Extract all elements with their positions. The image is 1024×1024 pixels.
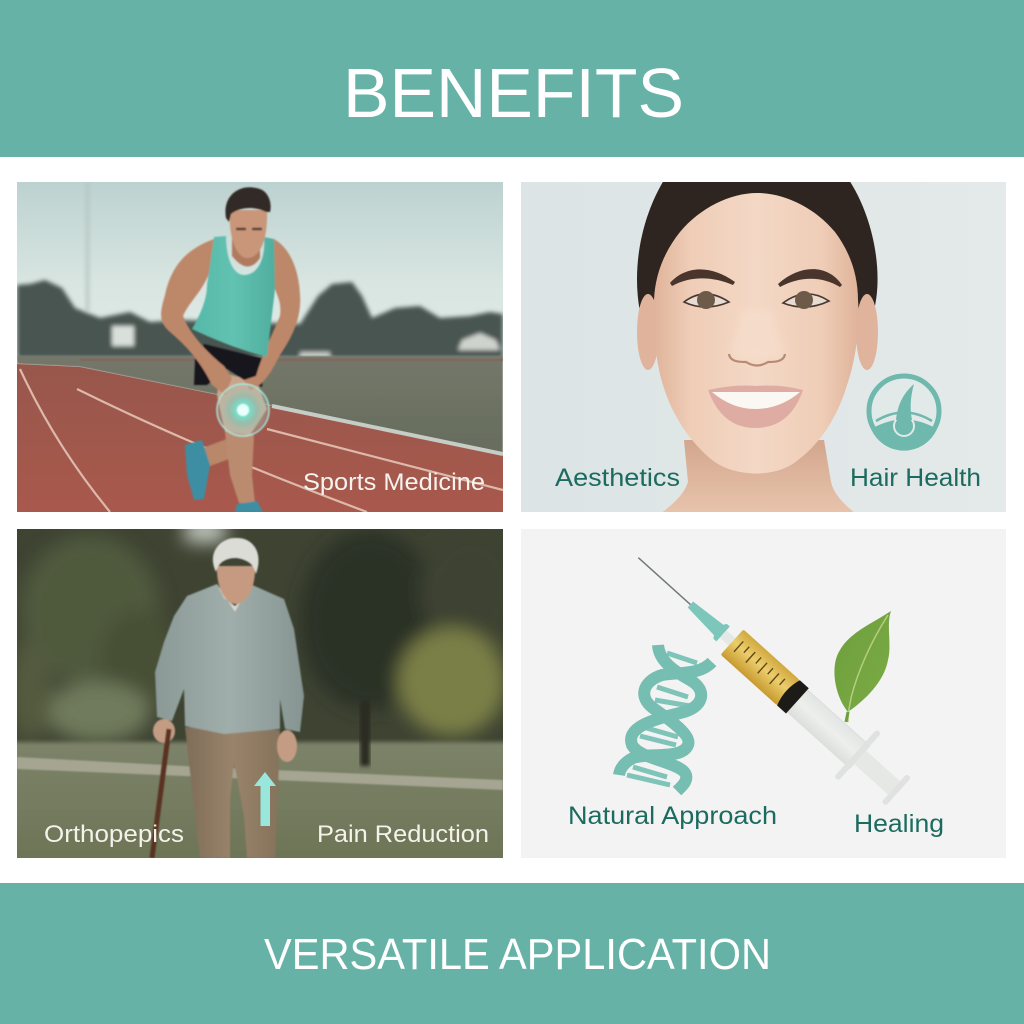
icon: green leaf xyxy=(834,611,891,722)
panel: sports medicine xyxy=(17,182,503,512)
collar xyxy=(218,586,240,612)
lawn and path xyxy=(17,740,503,858)
back shoe xyxy=(185,440,210,500)
icon: upward arrow xyxy=(254,772,276,826)
label: aesthetics: Aesthetics xyxy=(555,464,680,492)
face xyxy=(654,193,859,474)
nose xyxy=(730,310,784,360)
knee glow xyxy=(217,384,269,436)
label: sports medicine: Sports Medicine xyxy=(303,469,485,496)
background tree line xyxy=(17,182,503,359)
neck xyxy=(660,440,856,514)
hair xyxy=(225,187,271,222)
hair xyxy=(637,180,878,320)
barrel fluid xyxy=(721,629,800,705)
ears xyxy=(637,294,656,370)
graduation marks xyxy=(734,641,785,689)
thigh and knee xyxy=(217,372,267,435)
label: pain reduction: Pain Reduction xyxy=(317,821,489,848)
shorts xyxy=(194,344,265,387)
hair xyxy=(213,538,259,574)
panel: aesthetics and hair health xyxy=(521,180,1006,514)
blurred park background xyxy=(8,520,520,742)
icon: dna helix xyxy=(619,645,712,791)
neck xyxy=(232,236,260,267)
infield xyxy=(17,356,503,454)
hub xyxy=(684,597,730,641)
left arm xyxy=(161,239,232,395)
athlete xyxy=(161,187,300,512)
clear barrel xyxy=(787,690,870,768)
icon: hair follicle xyxy=(869,376,939,451)
flange xyxy=(834,729,881,781)
plunger rod xyxy=(854,750,900,795)
needle xyxy=(638,558,691,605)
hands xyxy=(153,719,175,743)
panel: orthopedics and pain reduction xyxy=(17,529,503,858)
walking cane xyxy=(152,729,169,858)
label: natural approach: Natural Approach xyxy=(568,802,777,830)
head xyxy=(217,566,255,604)
elderly man xyxy=(152,538,304,858)
tank top xyxy=(192,236,275,357)
label: orthopedics: Orthopepics xyxy=(44,821,184,848)
syringe xyxy=(617,534,920,816)
plunger seal xyxy=(775,678,809,714)
footer banner xyxy=(0,883,1024,1024)
sweater xyxy=(155,584,304,734)
eyebrows xyxy=(670,269,735,286)
woman portrait xyxy=(637,180,878,514)
label: hair health: Hair Health xyxy=(850,464,981,492)
eyes xyxy=(684,294,729,307)
facial shadows xyxy=(236,228,262,230)
back lower leg xyxy=(204,439,229,466)
panel: natural approach and healing xyxy=(521,529,1006,858)
title: BENEFITS xyxy=(343,54,684,132)
running track xyxy=(17,364,503,512)
footer text: VERSATILE APPLICATION xyxy=(264,930,771,979)
label: healing: Healing xyxy=(854,810,944,838)
header banner xyxy=(0,0,1024,157)
right arm xyxy=(244,239,300,390)
standing lower leg xyxy=(225,432,255,503)
smile xyxy=(708,386,803,428)
trousers xyxy=(185,727,280,858)
head xyxy=(230,210,267,258)
front shoe xyxy=(235,501,263,512)
